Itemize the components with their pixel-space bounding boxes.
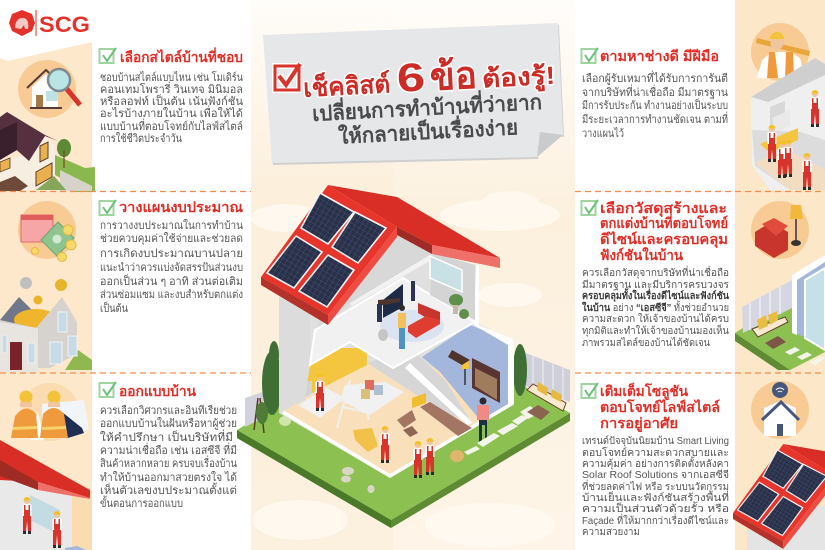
timber <box>397 402 472 437</box>
heading: เติมเต็มโซลูชัน <box>600 382 688 400</box>
body text <box>582 265 730 349</box>
heading: ตอบโจทย์ไลฟ์สไตล์ <box>600 398 720 415</box>
icon: armchair and lamp <box>751 201 809 259</box>
clouds <box>251 191 560 547</box>
body text: ส่วนซ่อมแซม และงบสำหรับตกแต่ง <box>100 289 243 301</box>
bench and table <box>527 382 566 420</box>
illustration: house wall below roof <box>747 505 825 550</box>
blue wall <box>422 325 508 420</box>
panel: plan the budget <box>0 199 243 372</box>
body text: เห็นตัวเลขงบประมาณตั้งแต่ <box>100 482 237 497</box>
body text: Solar Roof Solutions จากเอสซีจี <box>582 469 729 481</box>
panel: choose house style <box>0 47 243 192</box>
body text: ควรเลือกวิศวกรและอินทีเรียช่วย <box>100 404 237 417</box>
icon: checkbox <box>582 48 598 63</box>
body text: ควรเลือกวัสดุจากบริษัทที่น่าเชื่อถือ <box>582 265 729 279</box>
upper floor slab <box>310 278 475 368</box>
illustration: house with coins <box>0 277 92 372</box>
drop sheet <box>298 388 345 418</box>
body text: ความเป็นส่วนตัวด้วยรั้ว หรือ <box>582 501 729 515</box>
body text: มีการรับประกัน ทำงานอย่างเป็นระบบ <box>582 98 728 112</box>
left interior wall <box>280 353 312 412</box>
left illustration strip <box>0 42 92 550</box>
left outer wall <box>279 298 310 412</box>
paint cans <box>340 380 404 415</box>
heading: เลือกวัสดุสร้างและ <box>600 200 727 217</box>
heading: การอยู่อาศัย <box>600 415 678 432</box>
illustration: building under construction <box>751 58 825 190</box>
panel: choose materials <box>582 200 825 370</box>
potted plants <box>449 294 469 319</box>
body text: มีมาตรฐาน และมีบริการครบวงจร <box>582 279 730 291</box>
panel: house design <box>0 382 237 550</box>
stones <box>341 467 374 493</box>
body text <box>100 404 237 510</box>
body text: คอนเทมโพรารี่ วินเทจ มินิมอล <box>100 81 243 96</box>
icon: engineers with blueprint <box>11 383 89 441</box>
tile stack <box>353 428 378 452</box>
icon: calendar and money <box>18 201 76 262</box>
body text: ทำให้บ้านออกมาสวยตรงใจ ได้ <box>100 471 237 484</box>
body text: ออกเป็นส่วน ๆ อาทิ ส่วนต่อเติม <box>100 274 243 288</box>
house shell <box>279 250 513 478</box>
body text: ภาพรวมสไตล์ของบ้านได้ชัดเจน <box>582 337 710 349</box>
body text: ความน่าเชื่อถือ เช่น เอสซีจี ที่มี <box>100 442 237 457</box>
body text: ออกแบบบ้านในฝันหรือหาผู้ช่วย <box>100 417 237 430</box>
painter <box>316 374 324 411</box>
body text: ช่วยควบคุมค่าใช้จ่ายและช่วยลด <box>100 232 243 245</box>
dog <box>378 329 388 341</box>
body text: ที่ช่วยลดค่าไฟ หรือ ระบบนวัตกรรม <box>582 479 729 493</box>
body text: เทรนด์ปัจจุบันนิยมบ้าน Smart Living <box>582 435 729 447</box>
icon: smart home <box>751 381 809 439</box>
icon: checkbox <box>582 200 598 215</box>
paint splash <box>296 362 316 383</box>
heading <box>600 200 728 263</box>
bookcase and lamp <box>448 350 500 403</box>
illustration: large house <box>0 112 95 192</box>
body text: ความสวยงาม <box>582 527 640 538</box>
title line 1: 6 <box>396 56 426 101</box>
body text: ความสะดวก ให้เจ้าของบ้านได้ครบ <box>582 313 729 325</box>
body text: การวางงบประมาณในการทำบ้าน <box>100 219 243 232</box>
logo: SCG <box>9 10 90 37</box>
body text: มีระยะเวลาการทำงานชัดเจน ตามที่ <box>582 111 728 126</box>
body text: วางแผนไว้ <box>582 127 624 140</box>
body text: เลือกผู้รับเหมาที่ได้รับการการันตี <box>582 70 728 85</box>
man in living room <box>398 305 406 349</box>
illustration: solar roof close-up <box>733 444 825 549</box>
body text: จากบริษัทที่น่าเชื่อถือ มีมาตรฐาน <box>582 84 728 99</box>
stepping path <box>464 406 540 455</box>
icon: red checkbox <box>275 64 300 90</box>
lower floor <box>283 356 508 474</box>
body text: แนะนำว่าควรแบ่งจัดสรรปันส่วนงบ <box>100 262 243 274</box>
title card <box>263 23 564 165</box>
workers <box>380 426 434 478</box>
toolbox <box>412 393 426 408</box>
icon: checkbox <box>100 48 116 63</box>
icon: checkbox <box>100 382 116 397</box>
body text: บ้านเย็นและฟังก์ชันสร้างพื้นที่ <box>582 490 729 504</box>
body text <box>100 219 243 315</box>
dog <box>450 450 464 462</box>
body text: ครอบคลุมทั้งในเรื่องดีไซน์และฟังก์ชัน <box>582 288 729 302</box>
fences <box>245 352 570 427</box>
icon: checkbox <box>582 383 598 398</box>
panel: find a skilled contractor <box>582 23 825 190</box>
heading: ตามหาช่างดี มีฝีมือ <box>600 48 719 64</box>
body text: การเกิดงบประมาณบานปลาย <box>100 248 243 260</box>
title line 3: ให้กลายเป็นเรื่องง่าย <box>337 111 519 149</box>
main house roof with solar panels <box>261 185 500 325</box>
body text: ในบ้าน อย่าง “เอสซีจี” ทั้งช่วยอำนวย <box>582 300 729 314</box>
heading: ดีไซน์และครอบคลุม <box>600 230 728 248</box>
centre house illustration <box>237 225 570 528</box>
body text: เป็นต้น <box>100 301 128 315</box>
man in pink <box>477 398 489 442</box>
logo: SCG: SCG <box>39 12 90 37</box>
panel: lifestyle solutions <box>582 381 825 550</box>
body text: ให้คำปรึกษา เป็นบริษัทที่มี <box>100 429 233 444</box>
body text: Façade ที่ให้มากกว่าเรื่องดีไซน์และ <box>582 513 729 527</box>
heading: ฟังก์ชันในบ้าน <box>600 246 683 263</box>
body text: อะไรบ้างภายในบ้าน เพื่อให้ได้ <box>100 105 243 120</box>
trees <box>262 341 527 415</box>
title line 2: เปลี่ยนการทำบ้านที่ว่ายาก <box>311 86 543 126</box>
heading: วางแผนงบประมาณ <box>119 199 243 215</box>
heading: เลือกสไตล์บ้านที่ชอบ <box>120 47 243 65</box>
heading: ออกแบบบ้าน <box>119 383 196 399</box>
title line 1 <box>302 49 556 106</box>
icon: checkbox <box>100 200 116 215</box>
body text: ทุกมิติและทำให้เจ้าของบ้านมองเห็น <box>582 323 729 337</box>
upper back wall with windows <box>350 253 475 320</box>
heading: ตกแต่งบ้านที่ตอบโจทย์ <box>600 213 728 231</box>
background: centre column <box>251 0 575 550</box>
plant shelf <box>254 398 291 433</box>
ground <box>237 323 570 528</box>
title line 1: ต้องรู้! <box>481 62 556 95</box>
body text <box>582 435 729 538</box>
upper gable wall <box>315 225 433 330</box>
sofa and TV <box>377 281 444 342</box>
body text: ความคุ้มค่า อย่างการติดตั้งหลังคา <box>582 456 729 470</box>
right illustration strip <box>735 0 825 550</box>
stair underside <box>367 348 473 425</box>
body text: ชอบบ้านสไตล์แบบไหน เช่น โมเดิร์น <box>100 70 243 84</box>
ladder <box>337 380 369 428</box>
title line 1: ข้อ <box>429 55 478 99</box>
body text: สินค้าหลากหลาย ครบจบเรื่องบ้าน <box>100 455 237 470</box>
illustration: house patio <box>735 255 825 370</box>
front rim <box>283 403 513 476</box>
body text: ขั้นตอนการออกแบบ <box>100 495 183 510</box>
heading <box>600 382 720 432</box>
title line 1: เช็คลิสต์ <box>302 68 391 103</box>
section dividers <box>0 192 825 373</box>
icon: carpenter <box>751 23 810 81</box>
body text: หรือลอฟท์ เป็นต้น เน้นฟังก์ชัน <box>100 94 243 108</box>
right wall <box>474 265 514 404</box>
body text <box>582 70 728 140</box>
icon: house and magnifier <box>18 60 80 118</box>
body text <box>100 70 243 145</box>
body text: ตอบโจทย์ความสะดวกสบายและ <box>582 446 729 459</box>
yellow wall <box>312 348 367 393</box>
body text: แบบบ้านที่ตอบโจทย์กับไลฟ์สไตล์ <box>100 118 243 133</box>
body text: การใช้ชีวิตประจำวัน <box>100 132 182 145</box>
illustration: red roof and workers <box>0 440 92 550</box>
